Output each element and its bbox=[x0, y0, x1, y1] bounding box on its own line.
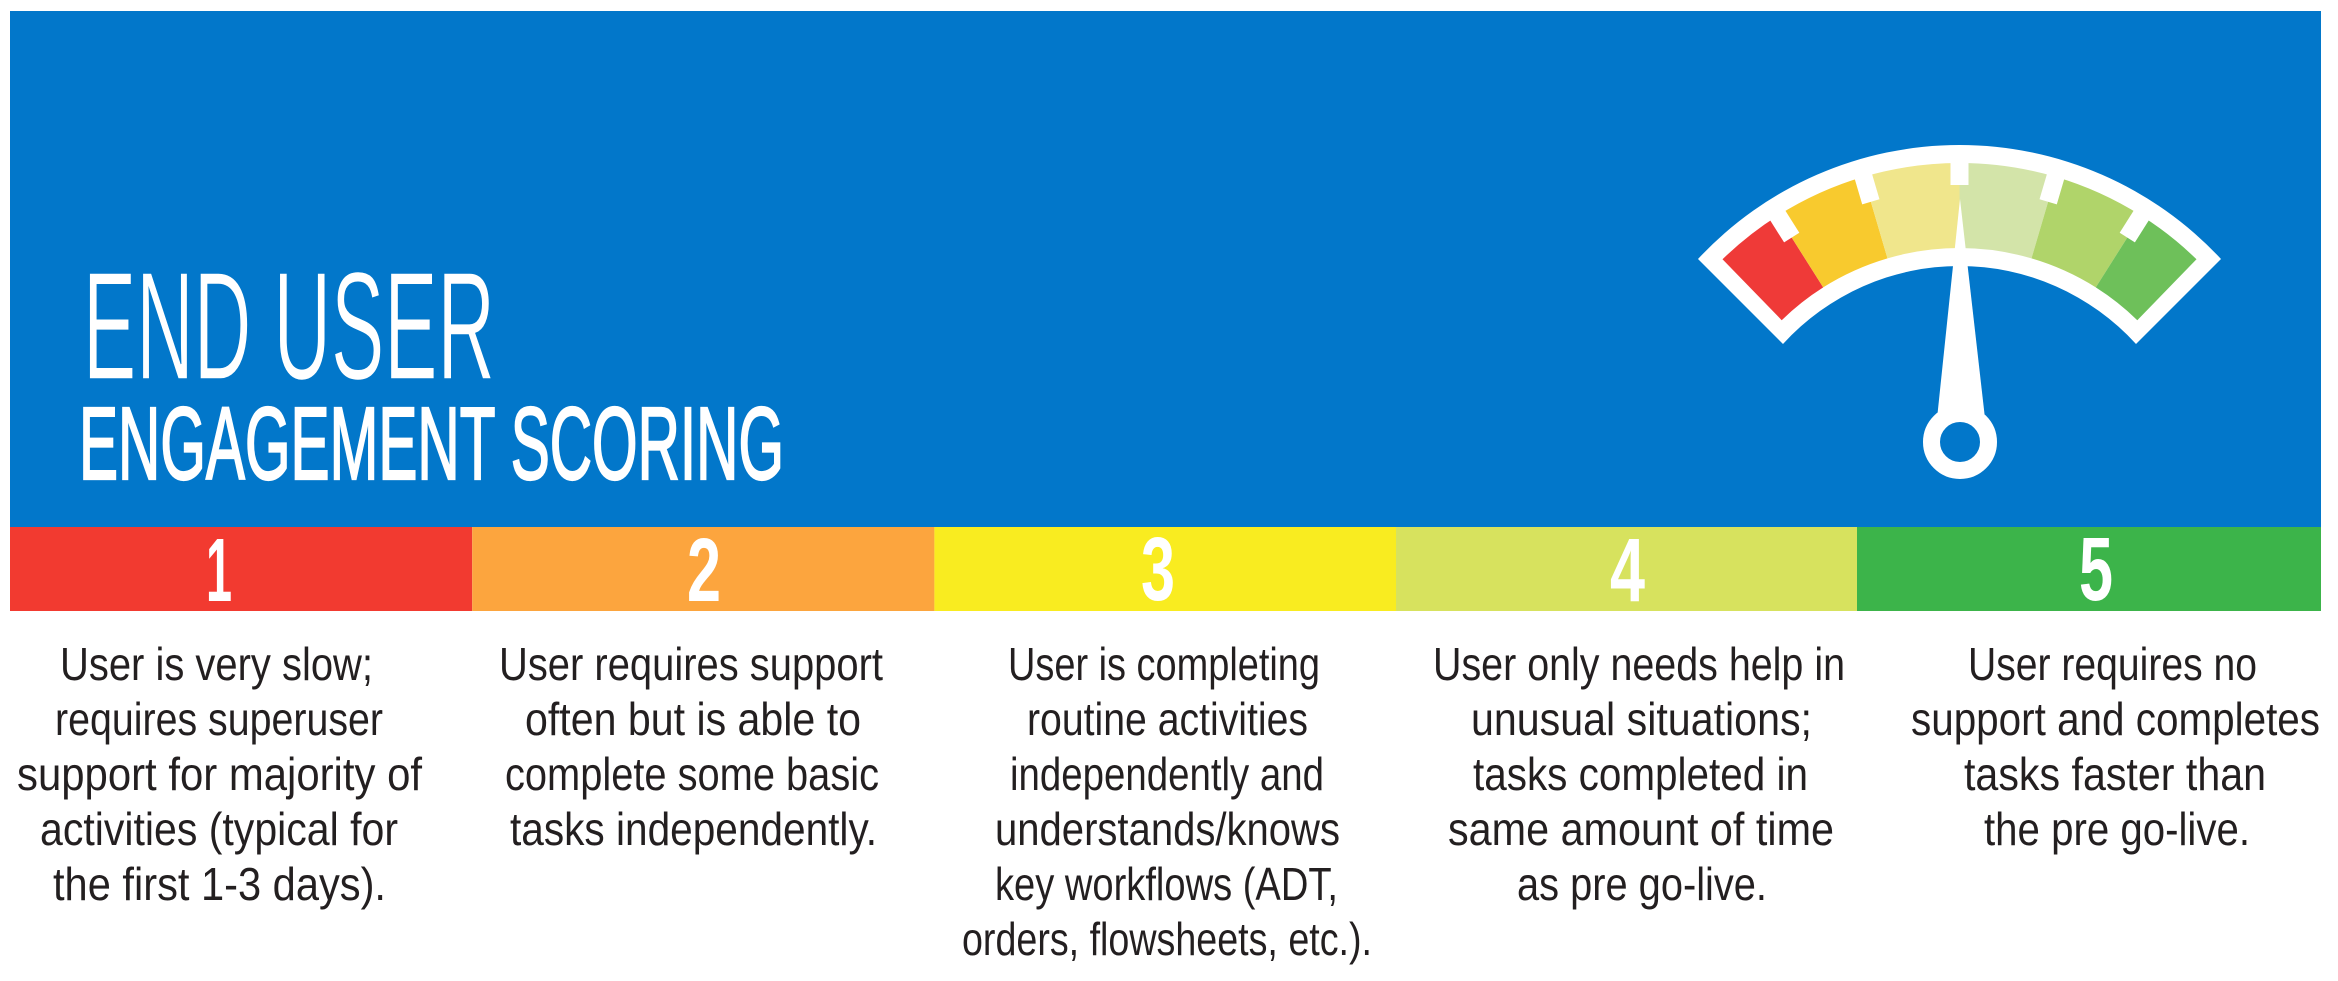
description: score 2 bbox=[499, 638, 883, 855]
score band 4 bbox=[1396, 521, 1857, 621]
description: score 3: orders, flowsheets, etc.). bbox=[962, 913, 1372, 965]
description: score 1: support for majority of bbox=[17, 748, 422, 800]
gauge segment: dark green bbox=[2096, 216, 2196, 320]
gauge needle bbox=[1932, 199, 1988, 470]
description: score 4: unusual situations; bbox=[1471, 693, 1812, 745]
score band 2: 2 bbox=[687, 521, 721, 621]
description: score 2: tasks independently. bbox=[510, 803, 877, 855]
gauge segment: red bbox=[1722, 216, 1823, 320]
description: score 3: understands/knows bbox=[995, 803, 1340, 855]
score band 5: 5 bbox=[2079, 520, 2113, 620]
score band 2 bbox=[472, 521, 934, 621]
heading: END USER: END USER bbox=[83, 240, 495, 412]
description: score 1: User is very slow; bbox=[60, 638, 373, 690]
description: score 3: key workflows (ADT, bbox=[995, 858, 1338, 910]
description: score 3: routine activities bbox=[1027, 693, 1308, 745]
gauge segment: amber bbox=[1778, 177, 1888, 287]
panel: blue header bbox=[10, 11, 2321, 527]
description: score 1 bbox=[17, 638, 422, 910]
score band 3: 3 bbox=[1141, 520, 1175, 620]
description: score 3: User is completing bbox=[1008, 638, 1320, 690]
description: score 2: complete some basic bbox=[505, 748, 879, 800]
gauge ticks bbox=[1766, 155, 2153, 242]
description: score 3: independently and bbox=[1010, 748, 1324, 800]
description: score 1: requires superuser bbox=[55, 693, 383, 745]
description: score 5 bbox=[1911, 638, 2320, 855]
description: score 5: tasks faster than bbox=[1964, 748, 2266, 800]
description: score 4: same amount of time bbox=[1448, 803, 1834, 855]
description: score 2: User requires support bbox=[499, 638, 883, 690]
score band 5 bbox=[1857, 520, 2321, 620]
score band 4: 4 bbox=[1610, 521, 1645, 621]
description: score 4 bbox=[1433, 638, 1845, 910]
description: score 1: the first 1-3 days). bbox=[53, 858, 386, 910]
gauge segment: pale green bbox=[1960, 163, 2056, 258]
heading: ENGAGEMENT SCORING: ENGAGEMENT SCORING bbox=[79, 386, 784, 501]
description: score 4: as pre go-live. bbox=[1517, 858, 1767, 910]
description: score 4: tasks completed in bbox=[1473, 748, 1808, 800]
description: score 5: User requires no bbox=[1968, 638, 2257, 690]
description: score 3 bbox=[962, 638, 1372, 965]
score band 1: 1 bbox=[206, 521, 232, 621]
description: score 1: activities (typical for bbox=[40, 803, 398, 855]
description: score 4: User only needs help in bbox=[1433, 638, 1845, 690]
gauge segment: pale yellow bbox=[1864, 163, 1960, 258]
title bbox=[79, 240, 784, 501]
icon: gauge bbox=[1698, 145, 2221, 471]
score band 1 bbox=[10, 521, 472, 621]
description: score 5: the pre go-live. bbox=[1984, 803, 2250, 855]
description: score 2: often but is able to bbox=[525, 693, 861, 745]
gauge frame bbox=[1698, 145, 2221, 344]
gauge segment: green bbox=[2032, 177, 2141, 287]
score band 3 bbox=[934, 520, 1396, 620]
